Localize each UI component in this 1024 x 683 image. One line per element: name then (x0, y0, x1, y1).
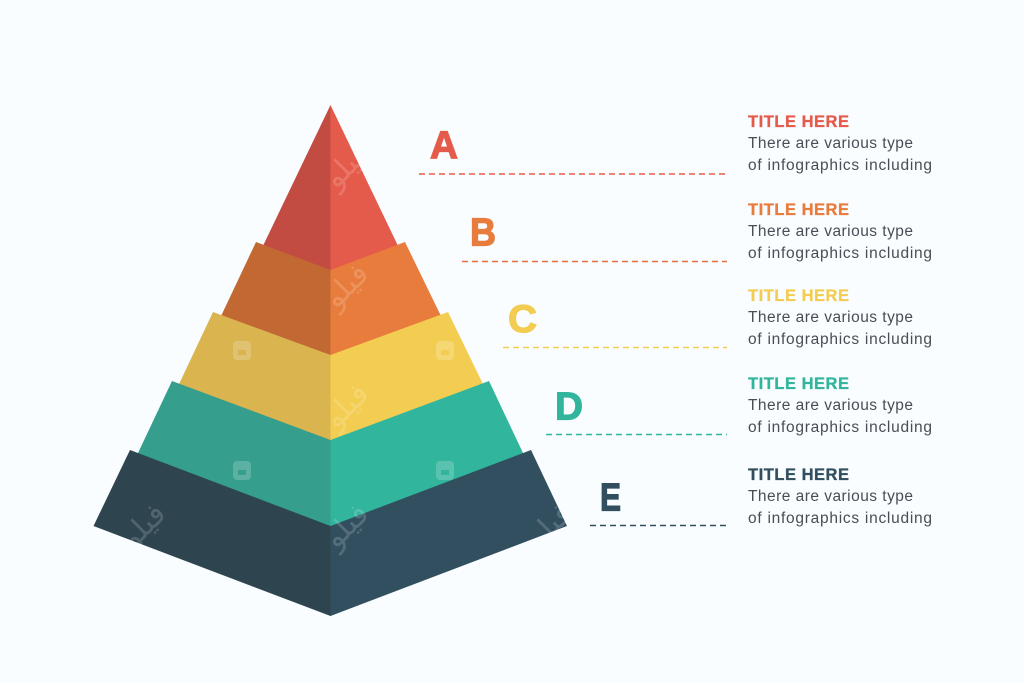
label B: B (470, 212, 496, 254)
layer C (177, 312, 485, 446)
label A: A (430, 124, 458, 168)
text block C: TITLE HERE (748, 287, 849, 305)
text block E: of infographics including (748, 510, 932, 527)
text block D: of infographics including (748, 419, 932, 436)
text block D: There are various type (748, 397, 913, 414)
watermarks: ﻓﻴﻠﻮ (518, 496, 579, 557)
watermarks: ﻓﻴﻠﻮ (315, 496, 376, 557)
text block A (748, 113, 932, 174)
text block D (748, 375, 932, 436)
text block C: of infographics including (748, 331, 932, 348)
text block B: TITLE HERE (748, 201, 849, 219)
watermarks (112, 136, 579, 557)
text block A: TITLE HERE (748, 113, 849, 131)
watermarks: ﻓﻴﻠﻮ (315, 136, 376, 197)
dashed leader lines (419, 174, 727, 526)
layer A (261, 105, 400, 280)
text block B: of infographics including (748, 245, 932, 262)
layer D (135, 381, 526, 532)
text block E: There are various type (748, 488, 913, 505)
label D: D (555, 386, 583, 428)
watermarks: ﻓﻴﻠﻮ (112, 376, 173, 437)
text block C: There are various type (748, 309, 913, 326)
text block B (748, 201, 932, 262)
watermarks: ﻓﻴﻠﻮ (112, 496, 173, 557)
label E: E (600, 476, 621, 520)
label C: C (508, 298, 537, 341)
text block A: of infographics including (748, 157, 932, 174)
text block E (748, 466, 932, 527)
text block E: TITLE HERE (748, 466, 849, 484)
layer B (219, 242, 443, 361)
watermarks: ﻓﻴﻠﻮ (315, 376, 376, 437)
text block A: There are various type (748, 135, 913, 152)
text block D: TITLE HERE (748, 375, 849, 393)
text block C (748, 287, 932, 348)
text block B: There are various type (748, 223, 913, 240)
layer E (94, 450, 567, 616)
watermarks: ﻓﻴﻠﻮ (315, 256, 376, 317)
pyramid (94, 105, 567, 616)
